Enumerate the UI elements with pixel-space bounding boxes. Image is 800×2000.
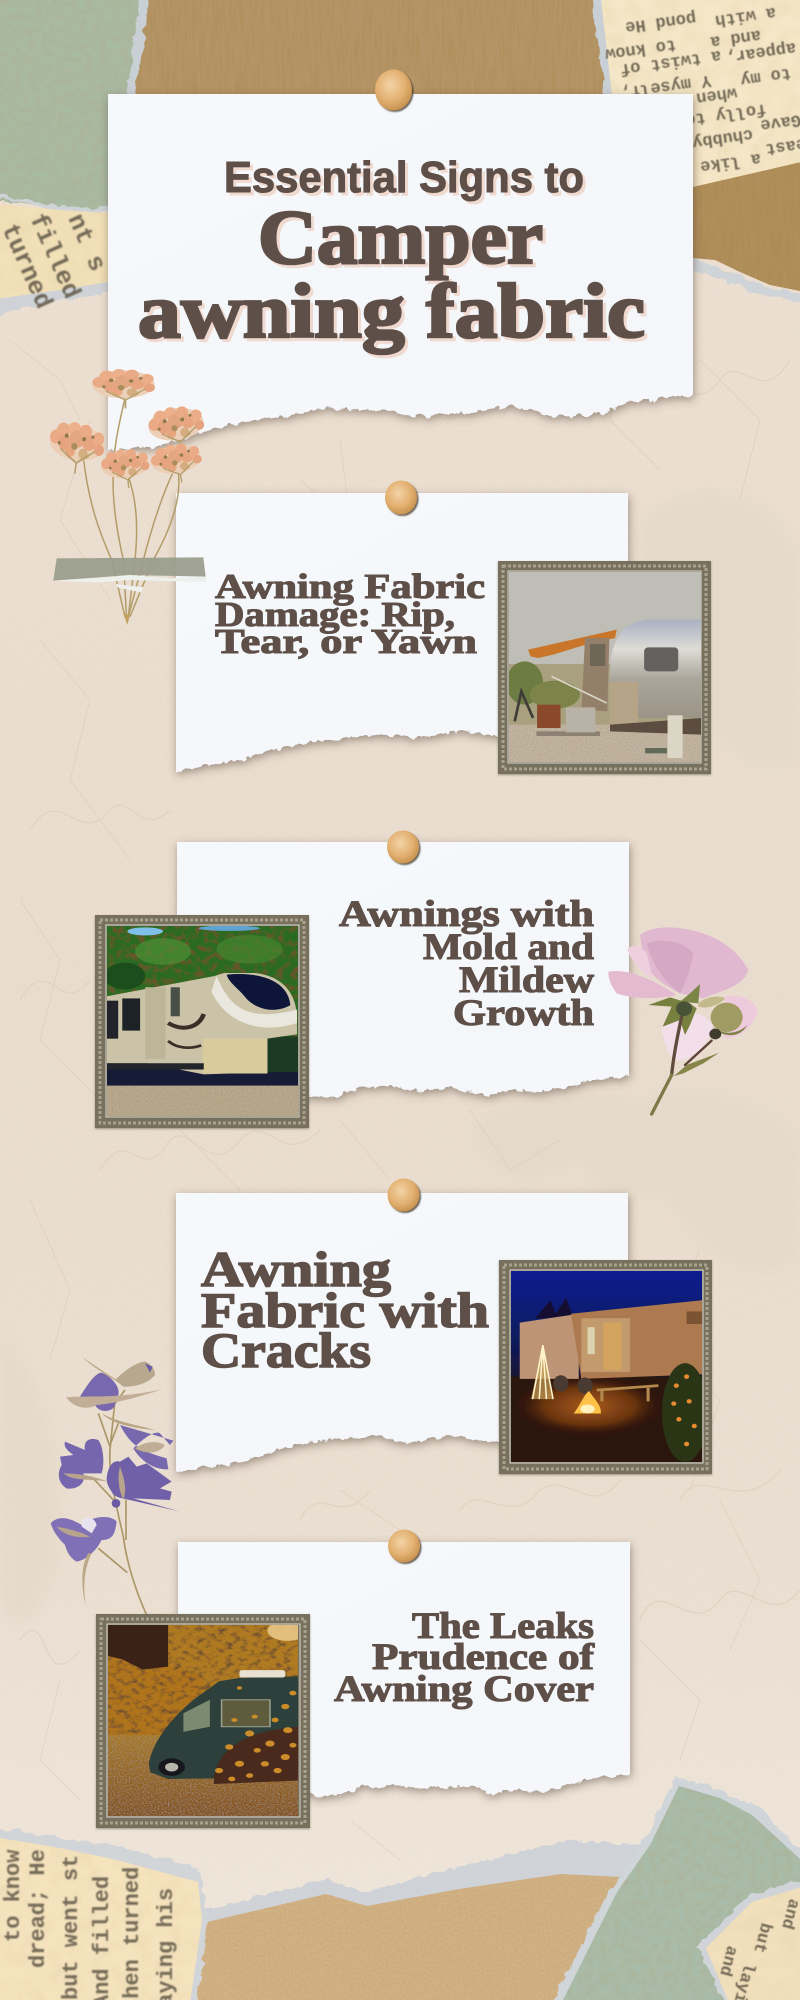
- torn paper: bottom-right green: [548, 1776, 800, 2000]
- heading: card 4: [334, 1606, 595, 1710]
- torn paper: bottom-left newspaper: dread; He: [26, 1849, 51, 1968]
- torn paper: top-right newspaper: to my: [739, 63, 792, 88]
- heading: card 2: Awnings with: [339, 894, 594, 935]
- panel: card 3: [166, 1193, 640, 1473]
- torn paper: left newspaper: [0, 203, 120, 316]
- photo: trailer scene: [509, 572, 701, 762]
- pin: card 2: [387, 830, 419, 864]
- pin: card 3: [388, 1178, 420, 1212]
- panel: card 4: [168, 1542, 642, 1797]
- heading: card 2: [339, 894, 594, 1034]
- heading: card 1: [215, 567, 485, 661]
- torn paper: top-right newspaper: [590, 0, 800, 195]
- torn paper: bottom-right newspaper: but: [748, 1920, 775, 1955]
- torn paper: top-right newspaper: Y myself,: [619, 70, 712, 101]
- torn paper: bottom-left newspaper: to know: [1, 1849, 26, 1942]
- torn paper: top-right newspaper: chubby: [691, 124, 754, 151]
- heading: card 3: [201, 1241, 489, 1378]
- torn paper: top kraft: [125, 0, 613, 110]
- photo frame 4: green van in autumn: [96, 1614, 310, 1828]
- icon: dried lace flowers with tape: [46, 369, 207, 625]
- photo frame 1: silver trailer with orange awning: [498, 561, 711, 774]
- title heading: Camper: [258, 194, 543, 280]
- torn paper: top-right newspaper: pond He: [624, 7, 697, 36]
- torn paper: top-right newspaper: a like: [699, 148, 762, 175]
- photo frame 2: RV under trees: [95, 915, 309, 1128]
- torn paper: bottom-left newspaper: [0, 1826, 208, 2000]
- torn paper: top-left green: [0, 0, 150, 214]
- heading: card 2: Growth: [453, 993, 594, 1034]
- torn paper: right kraft: [670, 160, 800, 304]
- panel: card 2: [167, 842, 640, 1097]
- pin: title card: [375, 70, 412, 110]
- heading: card 3: Cracks: [201, 1322, 371, 1378]
- photo: van scene: [108, 1625, 298, 1816]
- pin: card 1: [385, 480, 417, 514]
- torn paper: bottom-left newspaper: but went st: [59, 1855, 84, 2000]
- pin: card 4: [388, 1530, 420, 1562]
- title heading: Essential Signs to: [224, 153, 584, 202]
- heading: card 2: Mildew: [459, 960, 594, 1001]
- heading: card 3: Awning: [201, 1241, 391, 1297]
- icon: pink rose: [608, 927, 757, 1114]
- heading: card 1: Tear, or Yawn: [215, 622, 477, 661]
- heading: card 4: Prudence of: [372, 1637, 595, 1678]
- heading: card 3: Fabric with: [201, 1282, 489, 1338]
- torn paper: left newspaper: nt s: [61, 209, 112, 276]
- panel: card 1: [166, 493, 640, 773]
- heading: card 4: Awning Cover: [334, 1669, 594, 1710]
- photo frame 3: RV at night with campfire: [499, 1260, 712, 1474]
- heading: card 4: The Leaks: [412, 1606, 594, 1647]
- photo: RV scene: [107, 926, 298, 1116]
- torn paper: top-right newspaper: folly to: [684, 98, 767, 129]
- title heading: [138, 153, 645, 354]
- panel: title card: [95, 94, 705, 452]
- torn paper: bottom kraft: [192, 1840, 650, 2000]
- heading: card 2: Mold and: [423, 927, 594, 968]
- heading: card 1: Awning Fabric: [215, 567, 485, 606]
- heading: card 1: Damage: Rip,: [215, 595, 455, 634]
- torn paper: top-right newspaper: when: [695, 82, 738, 107]
- torn paper: left newspaper: filled: [23, 209, 86, 303]
- icon: purple delphinium: [51, 1357, 180, 1615]
- torn paper: bottom-right newspaper: [698, 1876, 800, 2000]
- torn paper: top-right newspaper: to know: [603, 34, 677, 63]
- torn paper: bottom-right newspaper: and: [714, 1943, 741, 1978]
- photo: night scene: [511, 1271, 702, 1462]
- torn paper: top-right newspaper: a twist of: [619, 45, 722, 78]
- torn paper: top-right newspaper: a with: [714, 2, 777, 29]
- title heading: awning fabric: [138, 268, 645, 354]
- torn paper: top-right newspaper: and a: [709, 25, 762, 50]
- torn paper: top-right newspaper: appear,: [724, 37, 797, 66]
